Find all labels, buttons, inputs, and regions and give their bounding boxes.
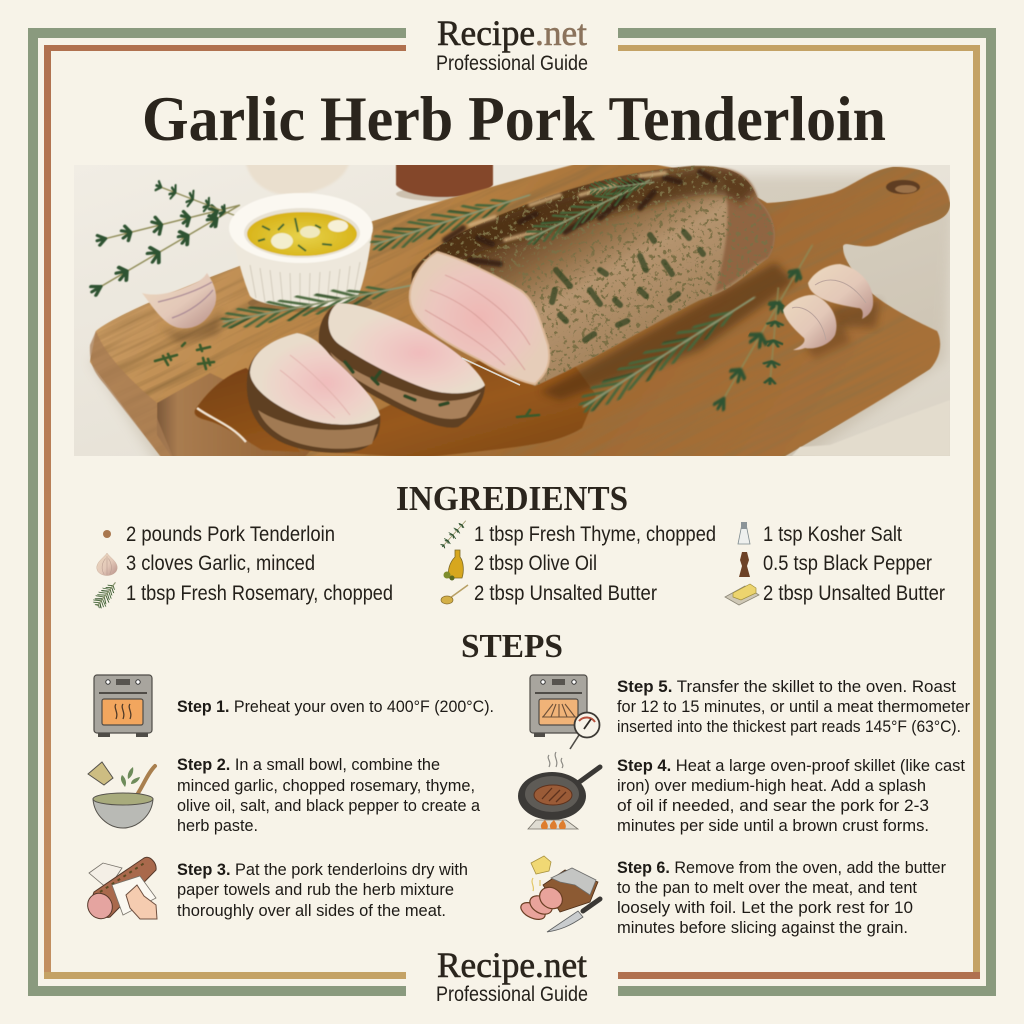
step 5 text: inserted into the thickest part reads 145°F (63°C). [617, 717, 961, 736]
icon: olive oil bottle [448, 550, 463, 578]
photo backdrop [74, 165, 950, 456]
thyme sprig [94, 203, 240, 248]
step 2 text: olive oil, salt, and black pepper to create a [177, 796, 481, 815]
handle hole [886, 180, 920, 194]
step 4 text: Step 4. Heat a large oven-proof skillet (like cast [617, 756, 965, 775]
step 2 text: minced garlic, chopped rosemary, thyme, [177, 776, 475, 795]
rosemary small on top [589, 174, 655, 198]
step 3 text: paper towels and rub the herb mixture [177, 880, 454, 899]
step 1 [94, 675, 494, 737]
wood grain texture [90, 165, 950, 456]
step 6 text: Step 6. Remove from the oven, add the butter [617, 858, 946, 877]
melted butter [271, 233, 293, 249]
footer subtitle: Professional Guide [436, 983, 588, 1006]
ingredient: pork: 2 pounds Pork Tenderloin [126, 523, 335, 546]
thyme sprig right [710, 240, 820, 413]
step 1 text: Step 1. Preheat your oven to 400°F (200°C). [177, 697, 494, 716]
title: Garlic Herb Pork Tenderloin [142, 83, 886, 154]
cloth napkin [792, 408, 950, 456]
step 6 text: to the pan to melt over the meat, and tent [617, 878, 917, 897]
hero photo illustration: pork tenderloin on a cutting board [74, 165, 950, 456]
icon: thyme [439, 518, 469, 549]
inner tan frame bottom-left [44, 972, 406, 979]
front plank [156, 373, 310, 456]
ingredient: thyme: 1 tbsp Fresh Thyme, chopped [474, 523, 716, 546]
herb oil [247, 212, 357, 256]
step 2 text: Step 2. In a small bowl, combine the [177, 755, 440, 774]
icon: skillet on burner [518, 752, 600, 829]
step 6 text: minutes before slicing against the grain. [617, 918, 908, 937]
icon: pork dot [103, 530, 111, 538]
roast body [410, 166, 775, 386]
chopped herbs on board [155, 343, 539, 417]
ingredient: rosemary [91, 578, 393, 610]
rosemary sprig right [576, 287, 762, 418]
herb flecks [258, 218, 332, 251]
ramekin fluting [250, 262, 360, 306]
step 3 text: Step 3. Pat the pork tenderloins dry with [177, 860, 468, 879]
cut face of roast [410, 252, 549, 384]
inner brown frame top-left [44, 45, 406, 979]
ingredients heading: INGREDIENTS [396, 479, 628, 518]
section: ingredients [91, 479, 945, 610]
board shadow [90, 175, 955, 468]
step 3 [83, 857, 468, 924]
rosemary on top of roast [522, 171, 655, 249]
rosemary sprig upper [369, 194, 531, 252]
crust band along the top [440, 181, 750, 255]
garlic clove right front [783, 295, 850, 358]
step 6 [518, 856, 946, 937]
ramekin shadow [248, 298, 372, 312]
ingredient: pepper: 0.5 tsp Black Pepper [763, 552, 932, 575]
tenderloin roast [400, 160, 795, 400]
icon: resting pork with butter and knife [518, 856, 600, 932]
cutting board [89, 165, 950, 456]
sauce highlight [197, 408, 246, 442]
header logo [436, 13, 588, 75]
step 3 text: thoroughly over all sides of the meat. [177, 901, 446, 920]
step 2 [88, 755, 481, 835]
step 4 text: iron) over medium-high heat. Add a splash [617, 776, 926, 795]
garlic clove right back [808, 264, 880, 328]
fibres on cut face [425, 275, 530, 370]
icon: mixing bowl [88, 762, 155, 828]
icon: butter dish [725, 586, 759, 605]
slice front [247, 333, 380, 453]
step 4 [518, 752, 965, 835]
light crust highlights [470, 173, 665, 240]
step 5 text: for 12 to 15 minutes, or until a meat thermometer [617, 697, 970, 716]
board left edge [90, 331, 175, 462]
ingredient: olive oil [444, 550, 597, 580]
step 5 [530, 675, 970, 749]
thyme sprigs left [88, 178, 244, 299]
crust char marks [445, 172, 714, 264]
icon: rubbing pork with towel [83, 857, 157, 924]
inner brown frame bottom-right [618, 972, 980, 979]
roast speckle texture [413, 166, 774, 384]
garlic clove left [142, 273, 222, 342]
ramekin inner [244, 208, 360, 258]
ingredient: olive oil: 2 tbsp Olive Oil [474, 552, 597, 575]
knife glint [462, 358, 520, 385]
pepper jar background [396, 160, 493, 201]
icon: garlic bulb [97, 553, 117, 576]
ingredient: salt: 1 tsp Kosher Salt [763, 523, 902, 546]
ingredient: butter spoon: 2 tbsp Unsalted Butter [474, 582, 657, 605]
icon: rosemary [91, 578, 121, 610]
board top surface [90, 160, 950, 462]
thyme sprig [154, 179, 235, 218]
ingredient: thyme [439, 518, 716, 549]
ingredient: rosemary: 1 tbsp Fresh Rosemary, chopped [126, 582, 393, 605]
herb blotches on roast side [552, 232, 703, 340]
thyme sprig [88, 204, 240, 298]
step 4 text: of oil if needed, and sear the pork for 2-3 [617, 796, 929, 815]
footer logo [436, 945, 588, 1006]
step 3 text [177, 860, 468, 920]
step 5 text [617, 677, 970, 736]
ramekin body [232, 232, 372, 307]
garlic bulb background [246, 165, 348, 194]
step 5 text: Step 5. Transfer the skillet to the oven. Roast [617, 677, 956, 696]
step 4 text [617, 756, 965, 835]
ramekin with herb oil [229, 193, 373, 312]
step 2 text [177, 755, 481, 835]
ingredient: butter: 2 tbsp Unsalted Butter [763, 582, 945, 605]
footer wordmark: Recipe.net [437, 945, 587, 985]
ingredient: garlic: 3 cloves Garlic, minced [126, 552, 315, 575]
roast end lobe [715, 168, 775, 292]
outer green frame left [28, 28, 406, 996]
slice rear [319, 303, 485, 428]
logo subtitle: Professional Guide [436, 52, 588, 75]
icon: oven with thermometer [530, 675, 600, 749]
ramekin rim [229, 193, 373, 263]
rosemary sprig under ramekin [220, 284, 411, 330]
icon: spoon [450, 585, 468, 598]
sauce pool [194, 360, 596, 456]
logo wordmark: Recipe.net [437, 13, 587, 53]
inner tan frame top-right [618, 45, 980, 979]
icon: pepper mill [739, 552, 750, 577]
icon: salt shaker [738, 525, 750, 544]
step 4 text: minutes per side until a brown crust forms. [617, 816, 929, 835]
outer green frame right [618, 28, 996, 996]
icon: oven [94, 675, 152, 737]
step 2 text: herb paste. [177, 816, 258, 835]
step 6 text [617, 858, 946, 937]
steps heading: STEPS [461, 628, 563, 665]
roast shadow [540, 262, 795, 400]
thyme sprig right two [761, 287, 787, 385]
step 6 text: loosely with foil. Let the pork rest for 10 [617, 898, 913, 917]
